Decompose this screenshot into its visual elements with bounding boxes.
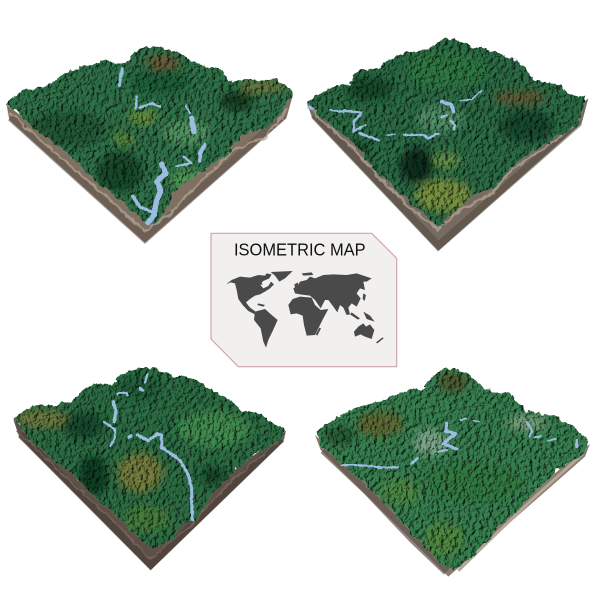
terrain surface [6,46,293,226]
title: ISOMETRIC MAP [234,240,366,260]
terrain block: bottom left [12,366,286,570]
rivers [342,419,577,467]
rivers [308,91,482,140]
rivers [119,68,205,223]
eurasia [293,273,372,315]
terrain surface [307,38,586,226]
islands [294,282,299,288]
terrain block: top left [0,39,300,246]
card background [211,233,397,367]
north america [226,273,274,314]
terrain surface [12,366,285,549]
world map [226,271,384,348]
australia [354,323,374,339]
block side walls [315,435,590,577]
south america [254,309,278,348]
block side walls [307,98,588,251]
block side walls [13,419,286,570]
terrain block: bottom right [315,368,590,577]
terrain block: top right [306,38,588,252]
rivers [104,374,193,520]
map card [211,233,397,367]
terrain surface [316,368,588,570]
africa [288,297,328,336]
block side walls [7,93,293,243]
greenland [271,271,293,282]
